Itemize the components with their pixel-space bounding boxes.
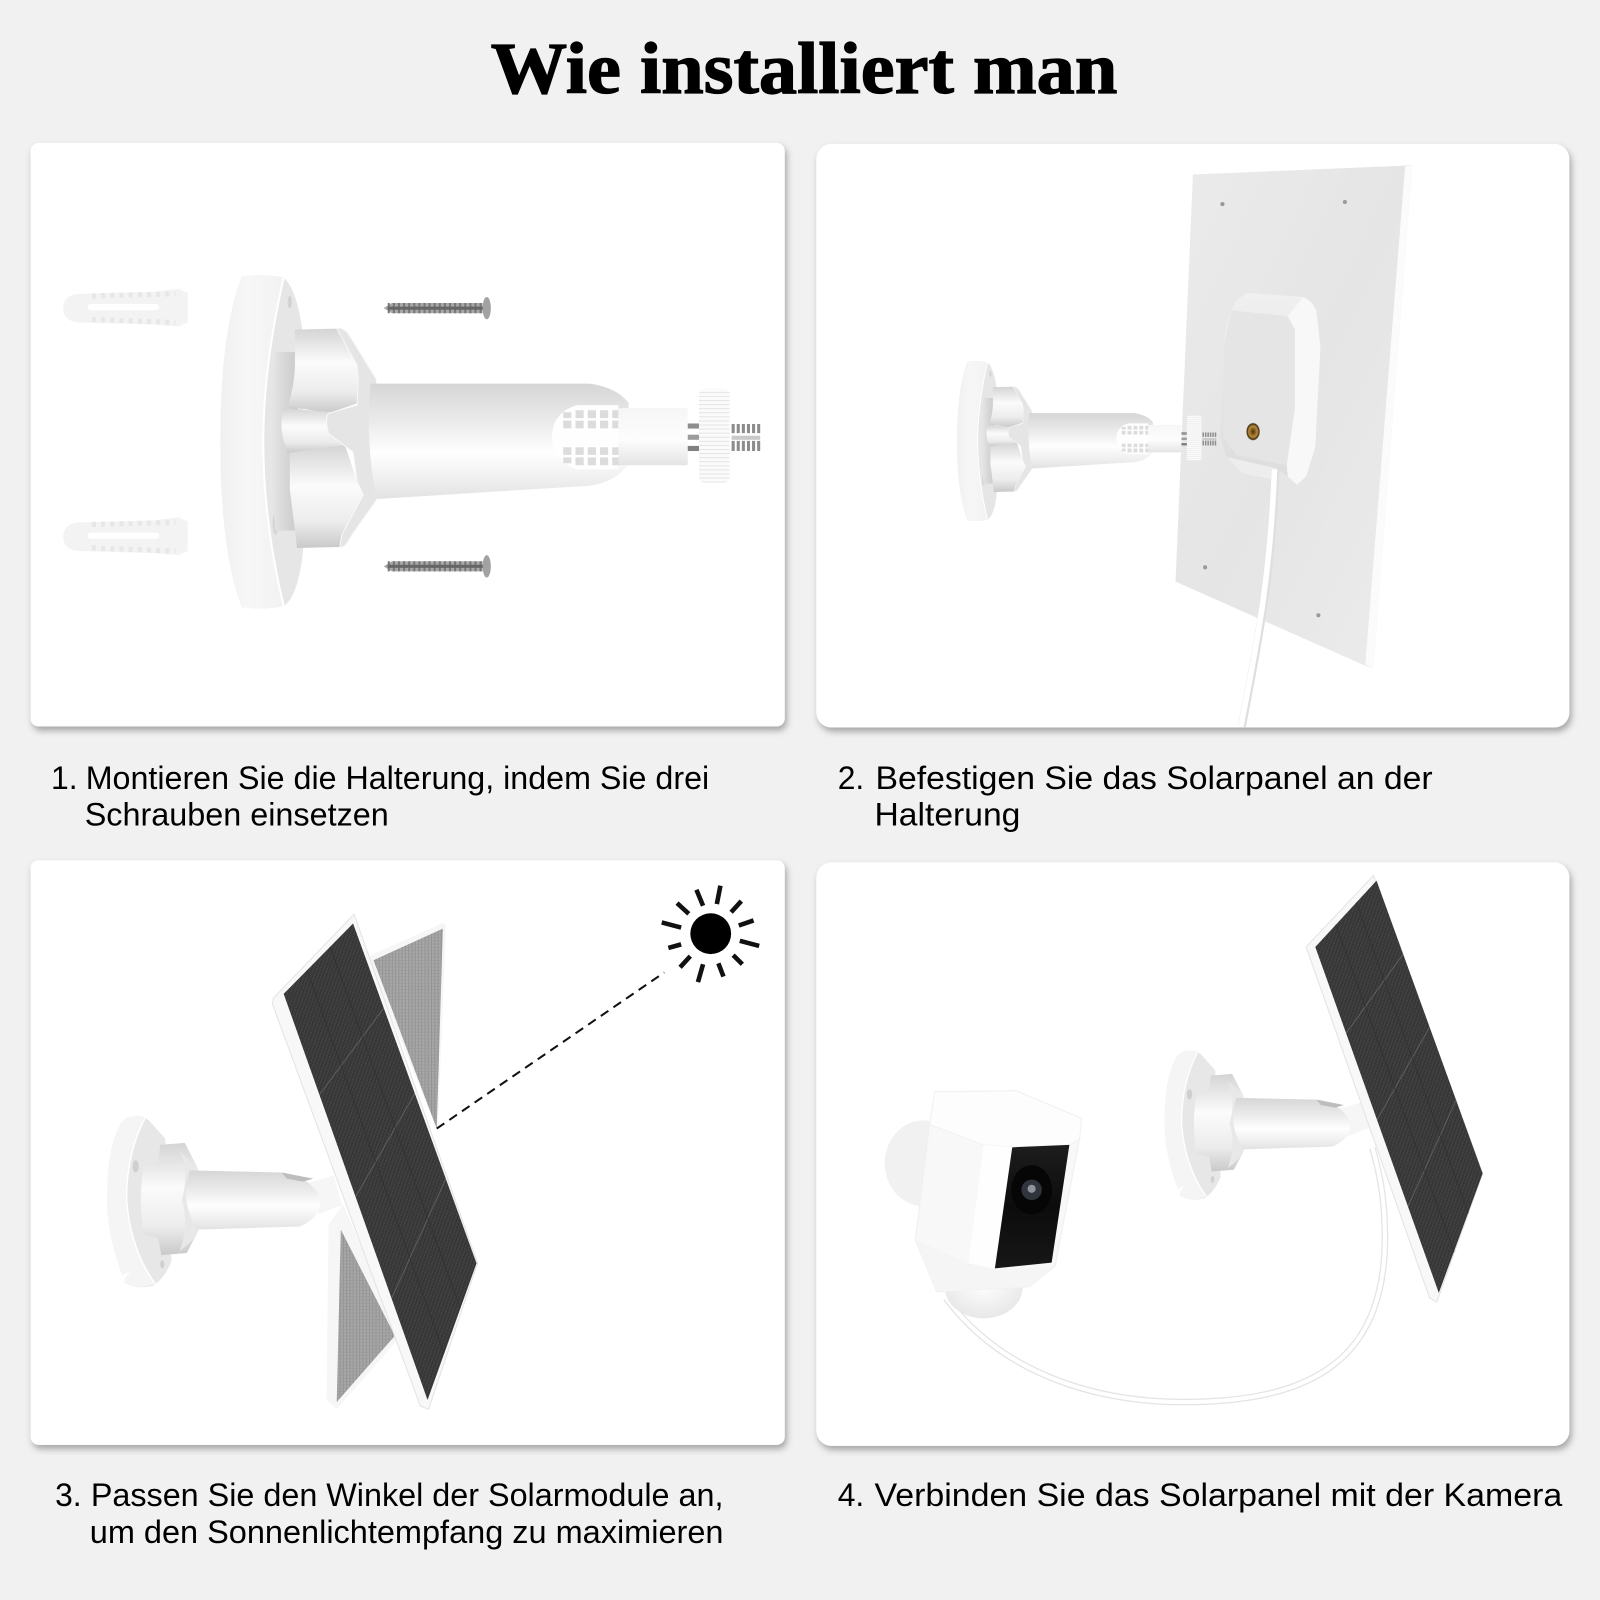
caption: step 1: 1. [51,759,78,796]
bracket [107,1116,342,1287]
solar panel back plate [1176,165,1412,668]
icon: upper wall anchor [63,289,188,327]
power cable [1241,469,1276,727]
caption: step 2: Halterung [874,796,1020,833]
rear solar panel position [327,922,446,1409]
connecting cable [946,1148,1385,1402]
title: Wie installiert man [491,28,1117,109]
caption: step 2: 2. [838,759,864,796]
caption: step 4: 4. [838,1476,864,1513]
panel: step 1 mount parts [31,143,785,727]
bracket [1165,1051,1369,1199]
caption: step 1 [51,759,709,833]
panel: step 3 angle adjustment [31,860,785,1445]
dashed sun ray line [437,972,664,1129]
icon: lower screw [384,555,491,578]
caption: step 2: Befestigen Sie das Solarpanel an der [876,759,1433,796]
caption: step 3 [55,1476,723,1550]
mounting block with brass socket [1220,293,1320,485]
caption: step 2 [838,759,1433,833]
icon: sun [662,886,759,982]
solar panel [1306,876,1483,1302]
caption: step 1: Schrauben einsetzen [85,796,389,833]
panel: step 2 solar panel on bracket [816,144,1569,728]
icon: lower wall anchor [63,517,188,555]
panel: step 4 connect to camera [816,862,1569,1446]
caption: step 3: um den Sonnenlichtempfang zu maximieren [90,1513,723,1550]
icon: wall mount bracket [220,275,760,608]
icon: upper screw [384,297,491,319]
caption: step 1: Montieren Sie die Halterung, indem Sie drei [86,759,709,796]
caption: step 4: Verbinden Sie das Solarpanel mit der Kamera [874,1476,1563,1513]
security camera [885,1091,1082,1318]
front solar panel [272,914,478,1409]
caption: step 3: 3. [55,1476,82,1513]
caption: step 3: Passen Sie den Winkel der Solarmodule an, [91,1476,723,1513]
bracket attached to panel [957,361,1216,521]
